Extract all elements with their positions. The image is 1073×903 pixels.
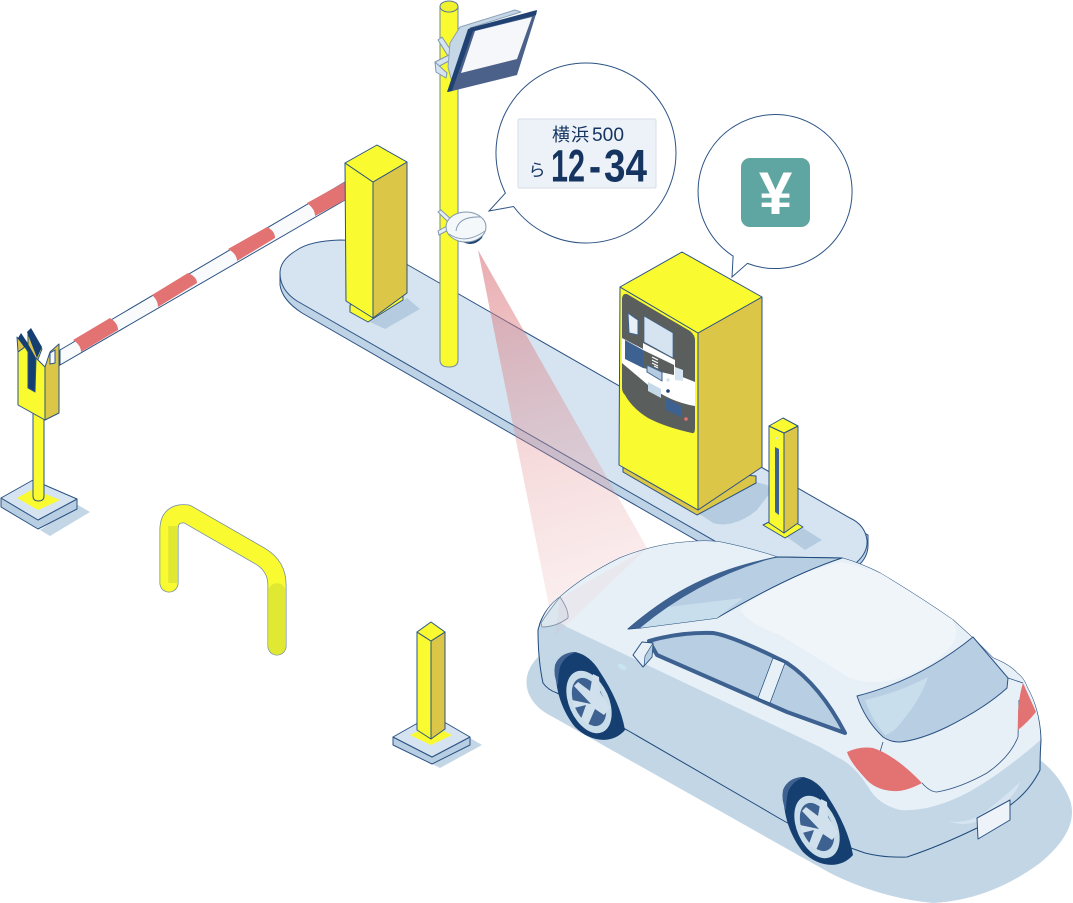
traffic island (280, 240, 868, 600)
entry pylon (345, 145, 420, 329)
licence plate: 横浜 (552, 125, 589, 145)
ticket slot (628, 313, 638, 335)
barrier housing (17, 328, 59, 420)
bracket (435, 37, 456, 78)
car shadow (526, 655, 1072, 903)
front wheel (554, 652, 625, 740)
rear window (857, 637, 1008, 742)
light pole (440, 1, 458, 367)
floodlight (435, 10, 537, 92)
tail light right (1018, 683, 1036, 730)
licence plate: ら (528, 161, 546, 180)
blue buttons (625, 340, 643, 368)
icon: yen (741, 158, 810, 227)
machine control panel (622, 294, 695, 433)
white band (622, 338, 695, 406)
licence plate: 34 (604, 140, 647, 192)
car (538, 541, 1041, 865)
licence plate: - (589, 140, 601, 192)
pylon shadow (370, 298, 420, 329)
bollard shadow (787, 528, 822, 550)
licence plate: 12 (551, 140, 585, 192)
island bollard (763, 418, 822, 550)
licence plate: 500 (592, 125, 624, 146)
dark strip (643, 350, 674, 375)
car upper body (541, 541, 1040, 810)
bollard shadow (430, 738, 482, 768)
licence plate (518, 119, 656, 192)
speech bubble: payment (698, 115, 852, 277)
screen (644, 316, 673, 358)
headlight (541, 597, 568, 627)
icon: yen: ¥ (759, 160, 793, 227)
rear wheel (782, 777, 853, 865)
security camera (438, 210, 486, 244)
rear plate (977, 800, 1010, 839)
side marker (616, 662, 628, 672)
gate post (1, 328, 90, 536)
car roof (740, 562, 956, 682)
small bollard (393, 622, 482, 768)
speech bubble: licence plate (489, 63, 676, 243)
camera beam (478, 250, 647, 636)
beam overlay on hood (555, 548, 647, 636)
side windows (649, 633, 845, 733)
gate shadow (40, 505, 90, 536)
windshield (628, 557, 842, 629)
car body (538, 541, 1041, 857)
side mirror (633, 642, 653, 667)
tail light left (847, 748, 922, 791)
trunk lines (880, 678, 1023, 792)
machine shadow (698, 482, 771, 524)
bumper highlight (948, 782, 1020, 824)
yellow U-shaped guard bar (169, 514, 277, 646)
payment machine (619, 252, 762, 515)
barrier arm (60, 182, 345, 365)
